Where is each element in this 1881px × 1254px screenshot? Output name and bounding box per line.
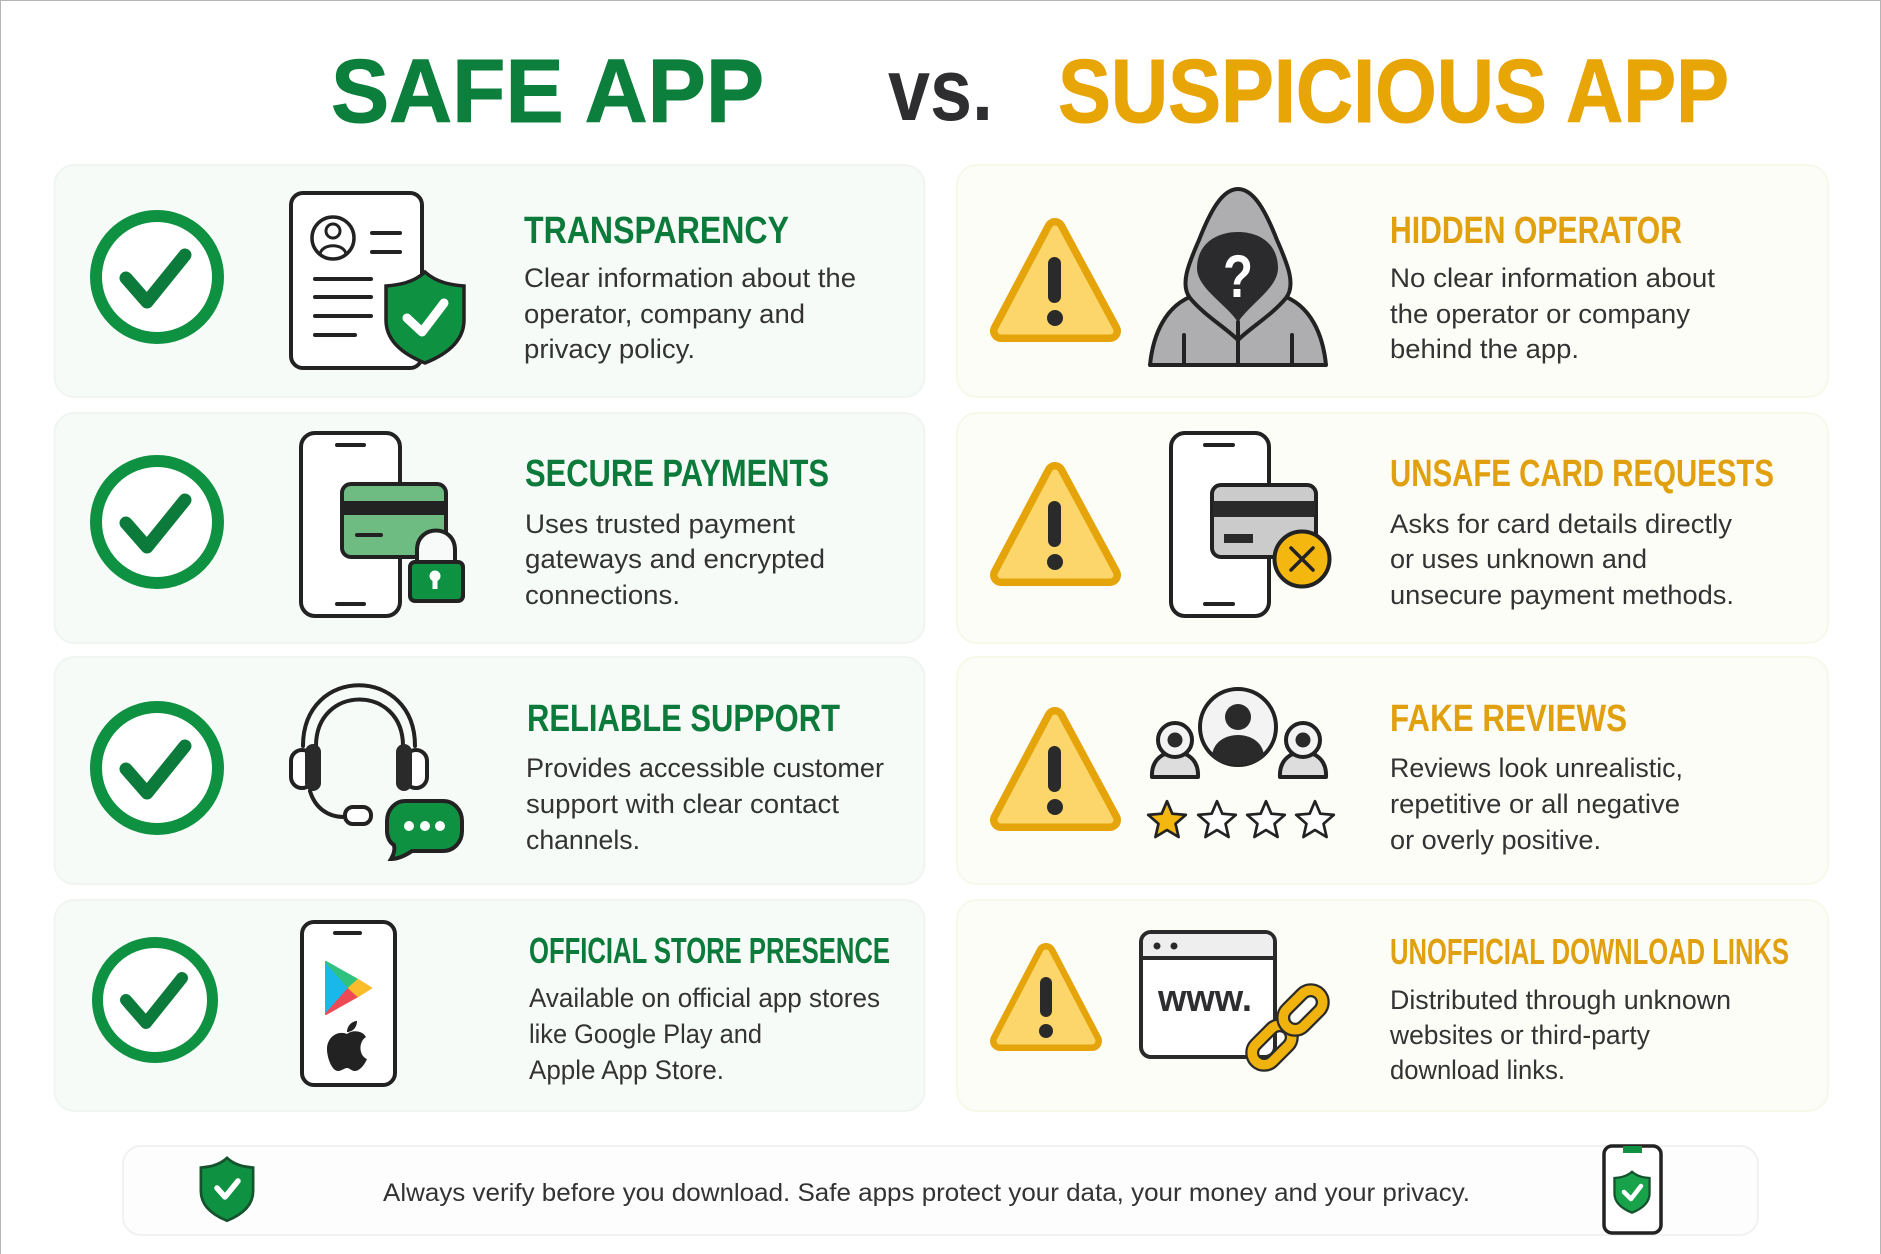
panel: secure payments [54, 413, 924, 643]
icon: green check circle [96, 216, 218, 338]
description: support with clear contact [526, 789, 840, 819]
title [331, 40, 1729, 142]
icon: green check circle [96, 707, 218, 829]
heading: OFFICIAL STORE PRESENCE [529, 930, 890, 971]
heading: UNSAFE CARD REQUESTS [1390, 453, 1774, 495]
description: Asks for card details directly [1390, 509, 1732, 539]
footer message: Always verify before you download. Safe apps protect your data, your money and your privacy. [383, 1179, 1470, 1207]
description: Clear information about the [524, 263, 856, 293]
icon: phone with rejected card [1171, 433, 1330, 616]
description [1390, 509, 1734, 610]
description: like Google Play and [529, 1019, 762, 1049]
description: the operator or company [1390, 299, 1691, 329]
icon: hooded figure: ? [1223, 243, 1253, 310]
icon: phone with card and lock [301, 433, 463, 616]
title: vs. [888, 40, 993, 139]
description [1390, 753, 1683, 855]
icon: footer phone with shield [1604, 1146, 1661, 1233]
description [524, 263, 856, 364]
heading: SECURE PAYMENTS [525, 453, 829, 495]
description [526, 753, 884, 855]
description: or uses unknown and [1390, 544, 1647, 574]
description: repetitive or all negative [1390, 789, 1680, 819]
icon: browser window with chain link [1141, 932, 1328, 1070]
icon: phone with store logos [302, 922, 395, 1085]
description: websites or third-party [1389, 1020, 1650, 1050]
icon: green check circle [96, 461, 218, 583]
icon: warning triangle [1000, 953, 1092, 1041]
icon: footer shield [201, 1158, 253, 1221]
panel: reliable support [54, 657, 924, 884]
icon: warning triangle [1001, 229, 1110, 331]
description [525, 509, 825, 610]
panel: transparency [54, 165, 924, 397]
icon: reviewer avatars [1152, 689, 1326, 777]
description: Uses trusted payment [525, 509, 796, 539]
title: SUSPICIOUS APP [1058, 42, 1729, 142]
description: Reviews look unrealistic, [1390, 753, 1683, 783]
footer banner [123, 1146, 1758, 1235]
panel: hidden operator [957, 165, 1828, 397]
description [1389, 985, 1731, 1085]
icon: document with shield [291, 193, 464, 368]
description [1390, 263, 1716, 364]
icon: warning triangle [1001, 473, 1110, 575]
description: connections. [525, 580, 680, 610]
description: or overly positive. [1390, 825, 1601, 855]
description: gateways and encrypted [525, 544, 825, 574]
icon: warning triangle [1001, 718, 1110, 820]
panel: unsafe card requests [957, 413, 1828, 643]
description: unsecure payment methods. [1390, 580, 1734, 610]
icon: browser window with chain link: www. [1157, 978, 1252, 1020]
icon: headset with chat bubble [291, 685, 462, 859]
description: Available on official app stores [529, 983, 880, 1013]
description [529, 983, 880, 1085]
title: SAFE APP [331, 42, 764, 142]
description: behind the app. [1390, 334, 1579, 364]
panel: official store presence [54, 900, 924, 1111]
heading: FAKE REVIEWS [1390, 698, 1627, 740]
panel: unofficial download links [957, 900, 1828, 1111]
description: Distributed through unknown [1390, 985, 1731, 1015]
description: Apple App Store. [529, 1055, 724, 1085]
description: No clear information about [1390, 263, 1716, 293]
heading: TRANSPARENCY [524, 210, 789, 252]
description: operator, company and [524, 299, 805, 329]
icon: star rating [1148, 801, 1334, 837]
icon: green check circle [98, 942, 212, 1058]
heading: RELIABLE SUPPORT [527, 698, 840, 740]
icon: hooded figure [1150, 189, 1326, 365]
heading: HIDDEN OPERATOR [1390, 210, 1682, 252]
description: Provides accessible customer [526, 753, 884, 783]
panel: fake reviews [957, 657, 1828, 884]
description: download links. [1390, 1055, 1565, 1085]
description: channels. [526, 825, 640, 855]
description: privacy policy. [524, 334, 695, 364]
